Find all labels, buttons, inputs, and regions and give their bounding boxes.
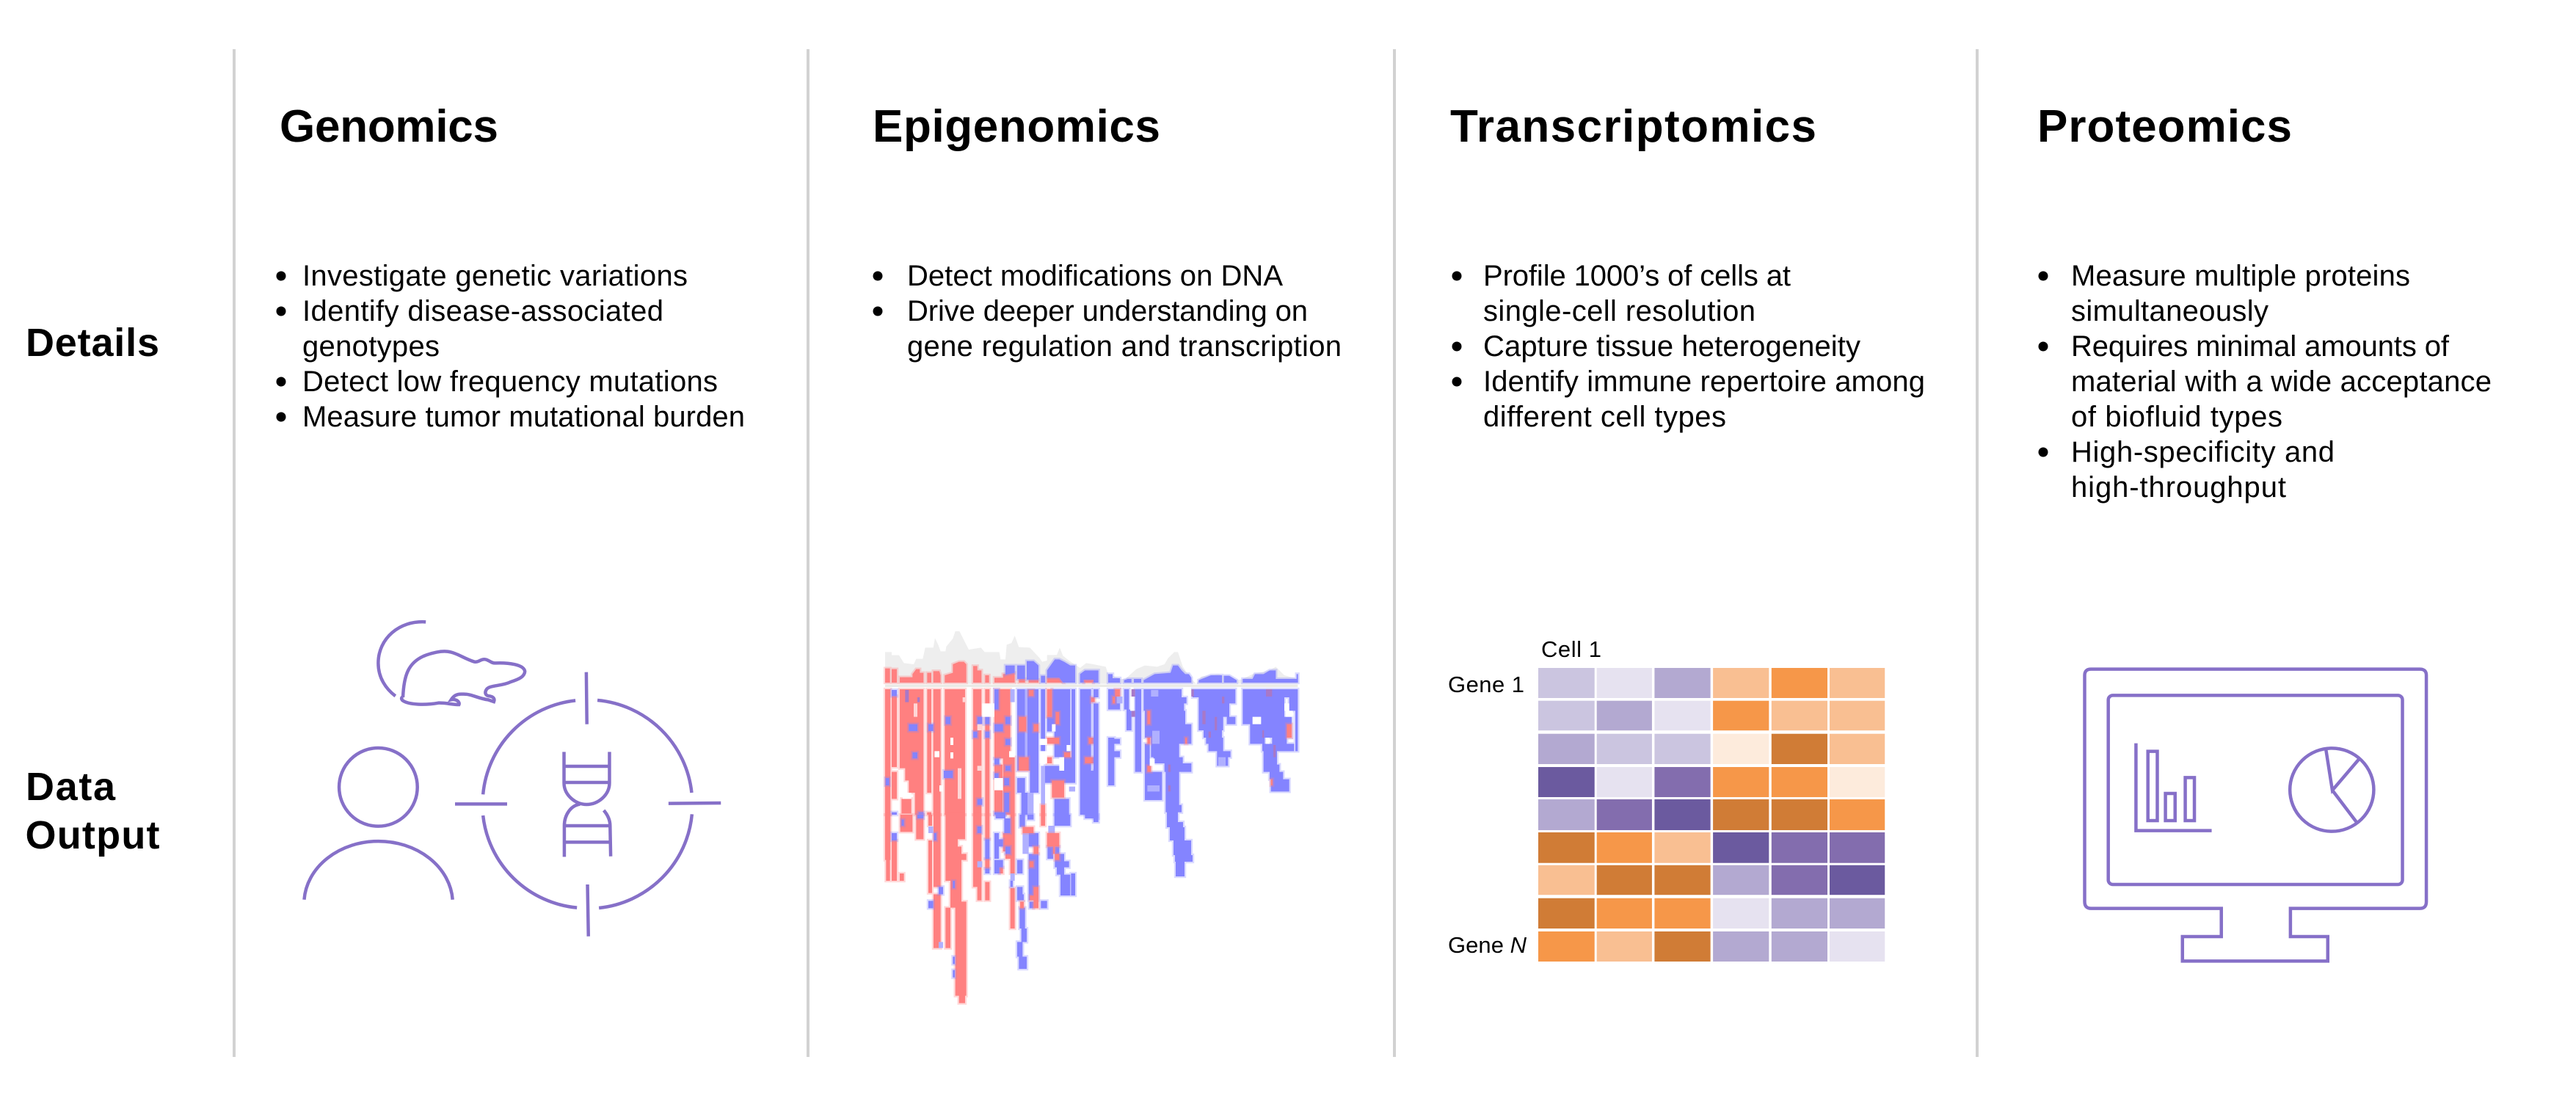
heading: Proteomics: Proteomics <box>2037 101 2292 152</box>
text block: Transcriptomics details: Capture tissue heterogeneity <box>1483 330 1860 363</box>
heading: Epigenomics: Epigenomics <box>873 101 1160 152</box>
icon: monitor frame <box>2084 669 2426 961</box>
row label: Data Output <box>25 765 160 857</box>
text block: Proteomics details: simultaneously <box>2071 295 2268 327</box>
text block: Transcriptomics details: different cell types <box>1483 401 1726 433</box>
chart: coverage area <box>885 631 1298 684</box>
text block: Proteomics details: High-specificity and <box>2071 436 2335 468</box>
text block: Proteomics details <box>2039 260 2492 504</box>
text block: Genomics details: Measure tumor mutational burden <box>302 401 745 433</box>
text block: Epigenomics details: gene regulation and transcription <box>907 330 1342 363</box>
text block: Genomics details <box>276 260 745 433</box>
text block: Epigenomics details: Detect modifications on DNA <box>907 260 1283 292</box>
icon: person <box>304 748 453 900</box>
text block: Genomics details: Investigate genetic variations <box>302 260 688 292</box>
heading: Genomics: Genomics <box>280 101 498 152</box>
row label: Data Output: Data <box>26 765 116 809</box>
icon: mouse, human and DNA target <box>304 622 721 937</box>
label: Gene 1: Gene 1 <box>1448 672 1524 697</box>
text block: Transcriptomics details: Identify immune repertoire among <box>1483 366 1925 398</box>
text block: Proteomics details: Requires minimal amounts of <box>2071 330 2450 363</box>
text block: Transcriptomics details: Profile 1000’s of cells at <box>1483 260 1791 292</box>
text block: Proteomics details: material with a wide acceptance <box>2071 366 2492 398</box>
text block: Proteomics details: of biofluid types <box>2071 401 2282 433</box>
icon: screen <box>2109 695 2403 884</box>
icon: mouse <box>378 622 525 705</box>
row label: Data Output: Output <box>25 813 160 857</box>
text block: Epigenomics details <box>873 260 1342 363</box>
text block: Proteomics details: Measure multiple proteins <box>2071 260 2410 292</box>
text block: Proteomics details: high-throughput <box>2071 471 2286 504</box>
text block: Genomics details: genotypes <box>302 330 440 363</box>
row label: Details: Details <box>26 321 159 365</box>
icon: computer monitor with charts <box>2084 669 2426 961</box>
text block: Transcriptomics details <box>1452 260 1925 433</box>
text block: Genomics details: Detect low frequency mutations <box>302 366 718 398</box>
icon: DNA helix <box>564 752 611 857</box>
label: Gene N: Gene N <box>1448 932 1527 958</box>
label: Cell 1: Cell 1 <box>1541 636 1601 662</box>
icon: crosshair target <box>455 672 721 937</box>
text block: Epigenomics details: Drive deeper understanding on <box>907 295 1308 327</box>
text block: Genomics details: Identify disease-associated <box>302 295 663 327</box>
text block: Transcriptomics details: single-cell resolution <box>1483 295 1755 327</box>
heading: Transcriptomics: Transcriptomics <box>1450 101 1816 152</box>
icon: bar chart <box>2136 744 2212 831</box>
chart: read pileup <box>885 631 1298 1003</box>
chart: gene expression heatmap <box>1448 636 1885 962</box>
icon: pie chart <box>2290 748 2373 832</box>
